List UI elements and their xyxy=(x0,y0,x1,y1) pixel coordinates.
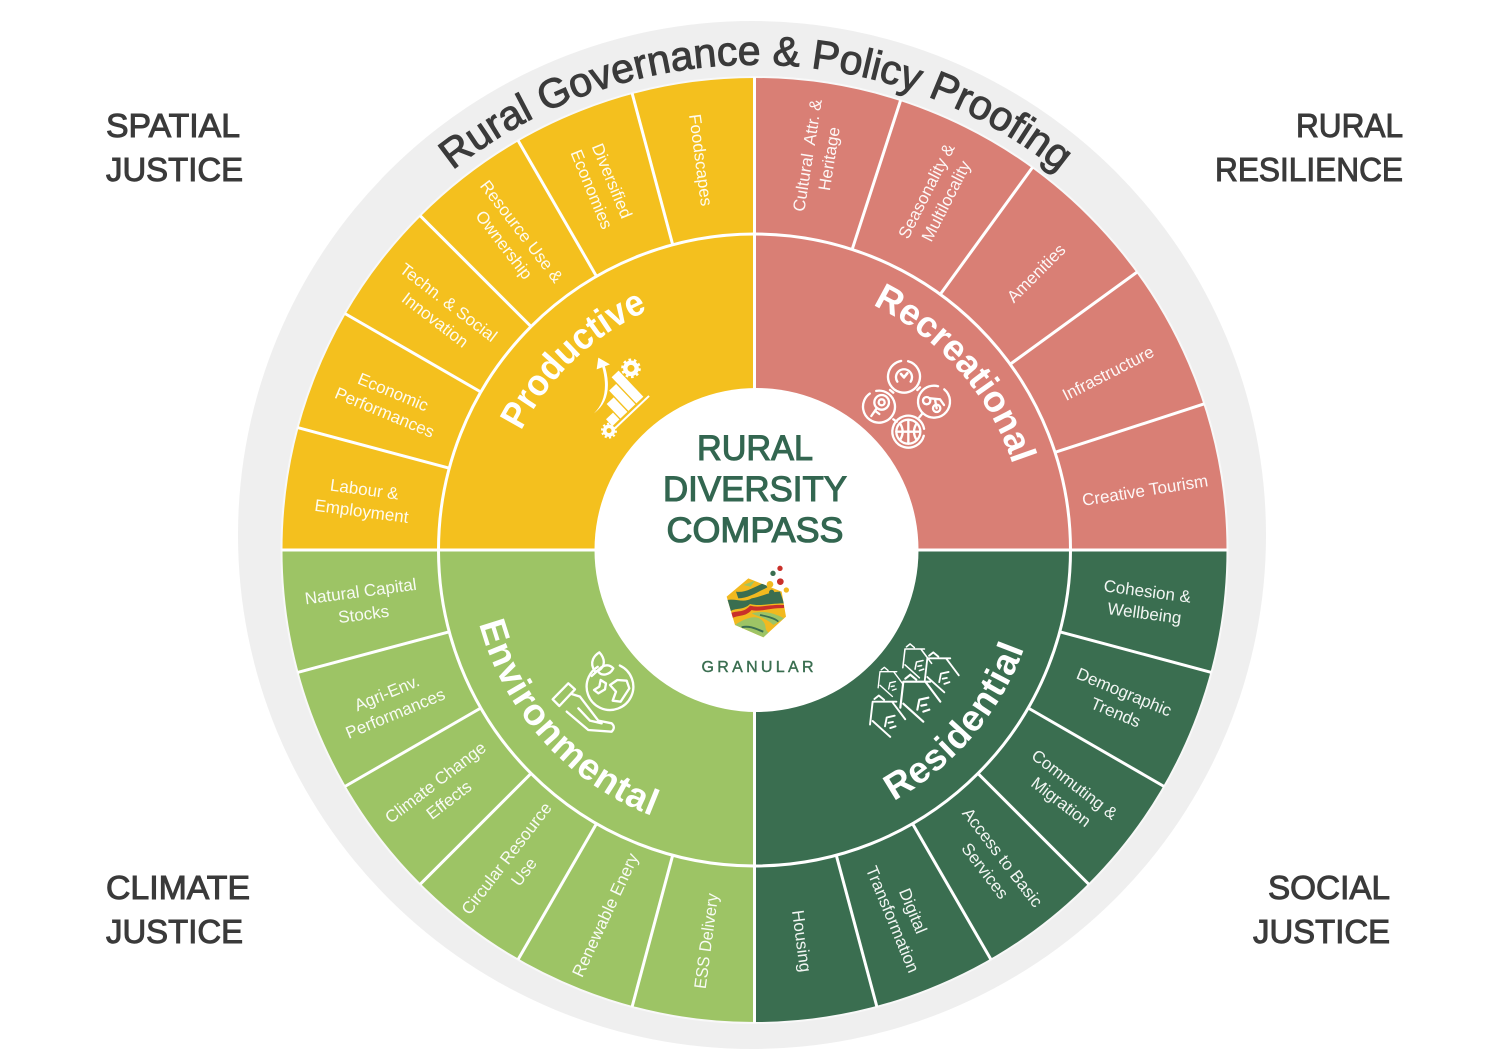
segment labels: environmental xyxy=(304,575,722,990)
label: ess delivery: ESS Delivery xyxy=(691,892,722,990)
label: seasonality: Seasonality & xyxy=(895,140,959,242)
heading: climate justice xyxy=(106,869,250,950)
label: diversified economies: Economies xyxy=(567,147,616,232)
label: digital transformation: Transformation xyxy=(862,863,923,976)
label: economic performances: Economic xyxy=(355,369,432,416)
heading: climate justice: JUSTICE xyxy=(106,913,243,950)
category label: recreational: Recreational xyxy=(874,283,1038,462)
label: labour and employment: Employment xyxy=(313,496,410,527)
icon: environmental globe and hand xyxy=(553,652,641,732)
heading: climate justice: CLIMATE xyxy=(106,869,250,906)
quadrant: productive xyxy=(282,77,754,550)
label: circular resource: Circular Resource xyxy=(458,799,556,918)
heading: rural resilience: RURAL xyxy=(1296,107,1403,144)
label: climate change: Effects xyxy=(423,777,475,823)
heading: spatial justice: SPATIAL xyxy=(106,107,240,144)
category label: productive: Productive xyxy=(500,296,644,429)
label: agri-env: Performances xyxy=(343,685,448,743)
label: demographic trends xyxy=(1065,664,1175,741)
logo: granular hexagon xyxy=(727,566,789,637)
label: labour and employment xyxy=(313,474,413,527)
label: basic services: Access to Basic xyxy=(958,804,1047,911)
heading: rural resilience: RESILIENCE xyxy=(1215,151,1403,188)
label: digital transformation: Digital xyxy=(895,886,931,936)
label: commuting: Commuting & xyxy=(1028,746,1122,824)
background disc xyxy=(238,21,1266,1049)
icon: residential houses xyxy=(870,644,959,737)
label: digital transformation xyxy=(862,855,943,976)
quadrant: environmental xyxy=(282,550,754,1023)
heading: spatial justice: JUSTICE xyxy=(106,151,243,188)
quadrant: residential xyxy=(754,550,1228,1023)
label: cohesion: Cohesion & xyxy=(1103,576,1193,607)
label: natural capital xyxy=(304,575,421,631)
quadrant: recreational xyxy=(754,77,1228,550)
label: housing: Housing xyxy=(788,909,815,973)
label: commuting: Migration xyxy=(1027,773,1095,831)
compass wheel xyxy=(282,77,1228,1023)
icon: productive chart xyxy=(586,358,650,438)
label: resource use: Ownership xyxy=(472,207,536,283)
icon: recreational circles xyxy=(860,357,957,451)
label: cohesion: Wellbeing xyxy=(1106,599,1183,628)
label: creative tourism: Creative Tourism xyxy=(1081,471,1209,510)
label: cultural heritage: Heritage xyxy=(815,126,844,192)
label: foodscapes: Foodscapes xyxy=(685,113,716,207)
category label: environmental: Environmental xyxy=(480,618,660,815)
centre title: COMPASS xyxy=(666,511,844,550)
label: techn and social innovation: Techn. & Social xyxy=(396,259,501,346)
label: agri-env xyxy=(334,664,448,743)
label: seasonality xyxy=(895,140,979,252)
curved heading: governance: Rural Governance & Policy Proofing xyxy=(438,36,1071,174)
label: basic services: Services xyxy=(957,839,1012,903)
label: demographic trends: Trends xyxy=(1088,694,1143,731)
centre title: RURAL xyxy=(697,429,813,468)
heading: spatial justice xyxy=(106,107,243,188)
centre circle xyxy=(594,388,918,712)
label: economic performances: Performances xyxy=(332,384,437,442)
label: infrastructure: Infrastructure xyxy=(1059,342,1157,405)
segment labels: recreational xyxy=(789,97,1209,510)
label: demographic trends: Demographic xyxy=(1074,664,1175,721)
heading: social justice: JUSTICE xyxy=(1253,913,1390,950)
heading: social justice: SOCIAL xyxy=(1268,869,1390,906)
label: climate change: Climate Change xyxy=(381,738,490,827)
segment labels: productive xyxy=(313,113,716,527)
category label: residential: Residential xyxy=(882,641,1024,800)
label: cultural heritage xyxy=(789,97,848,216)
logo: granular wordmark: GRANULAR xyxy=(702,659,814,676)
label: amenities: Amenities xyxy=(1003,240,1069,306)
label: renewable energy: Renewable Enery xyxy=(568,850,643,980)
centre title: DIVERSITY xyxy=(663,470,847,509)
label: cohesion xyxy=(1100,576,1193,629)
label: cultural heritage: Cultural Attr. & xyxy=(789,97,826,213)
label: seasonality: Multilocality xyxy=(918,157,975,245)
label: techn and social innovation: Innovation xyxy=(398,289,472,352)
label: labour and employment: Labour & xyxy=(329,476,400,504)
heading: rural resilience xyxy=(1215,107,1403,188)
label: agri-env: Agri-Env. xyxy=(352,671,422,715)
label: economic performances xyxy=(332,363,446,442)
label: resource use: Resource Use & xyxy=(476,177,567,287)
label: diversified economies: Diversified xyxy=(588,141,636,221)
label: diversified economies xyxy=(567,138,637,232)
label: natural capital: Natural Capital xyxy=(304,575,418,608)
segment labels: residential xyxy=(788,576,1193,976)
label: natural capital: Stocks xyxy=(337,602,390,627)
label: circular resource: Use xyxy=(507,854,541,890)
centre title xyxy=(663,429,847,550)
heading: social justice xyxy=(1253,869,1390,950)
